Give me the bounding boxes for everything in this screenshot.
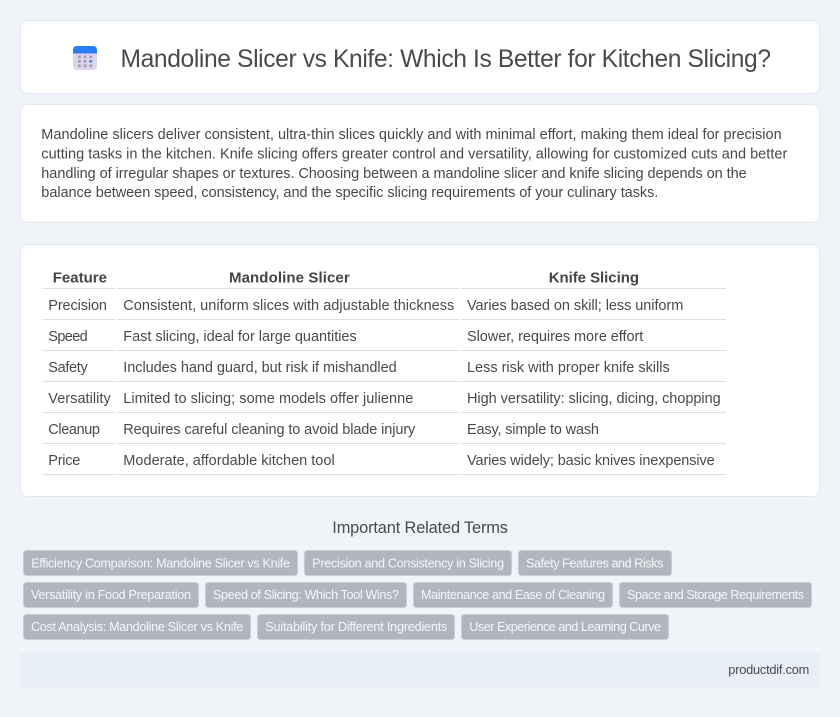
chip: Precision and Consistency in Slicing xyxy=(312,556,504,570)
table row: safety: Less risk with proper knife skills xyxy=(467,360,670,376)
table row: versatility xyxy=(43,391,726,413)
table row: speed xyxy=(43,329,726,351)
table row: price: Moderate, affordable kitchen tool xyxy=(123,453,335,469)
text block: introduction paragraph: cutting tasks in the kitchen. Knife slicing offers greater control and versatility, allowing for customized cuts and better xyxy=(41,146,787,162)
table row: cleanup: Easy, simple to wash xyxy=(467,422,599,438)
chip: Safety Features and Risks xyxy=(526,556,663,570)
chip: Cost Analysis: Mandoline Slicer vs Knife xyxy=(31,620,243,634)
footer xyxy=(20,653,820,687)
table row: speed: Speed xyxy=(48,329,88,345)
table row: speed: Fast slicing, ideal for large quantities xyxy=(123,329,357,345)
chip xyxy=(462,614,668,640)
table row: speed: Slower, requires more effort xyxy=(467,329,643,345)
panel: related term chips xyxy=(24,550,812,640)
table row: safety: Includes hand guard, but risk if mishandled xyxy=(123,360,397,376)
text block: introduction paragraph xyxy=(41,127,787,201)
table row: cleanup: Cleanup xyxy=(48,422,100,438)
table row: precision: Consistent, uniform slices with adjustable thickness xyxy=(123,298,454,314)
icon: calendar xyxy=(73,46,97,70)
table row: versatility: Limited to slicing; some models offer julienne xyxy=(123,391,413,407)
table row: precision: Varies based on skill; less uniform xyxy=(467,298,683,314)
panel: introduction xyxy=(20,104,820,222)
chip: User Experience and Learning Curve xyxy=(469,620,661,634)
chip xyxy=(24,582,198,608)
chip xyxy=(24,614,250,640)
table header row: Feature xyxy=(53,270,107,287)
chip xyxy=(24,550,298,576)
table row: versatility: Versatility xyxy=(48,391,111,407)
table row: safety: Safety xyxy=(48,360,88,376)
chip: Efficiency Comparison: Mandoline Slicer vs Knife xyxy=(31,556,290,570)
panel: comparison table xyxy=(20,244,820,496)
chip: Maintenance and Ease of Cleaning xyxy=(421,588,605,602)
table row: price: Price xyxy=(48,453,80,469)
text block: introduction paragraph: balance between speed, consistency, and the specific slicing requirements of your culinary tasks. xyxy=(41,185,658,201)
chip xyxy=(258,614,454,640)
text block: introduction paragraph: handling of irregular shapes or textures. Choosing between a mandoline slicer and knife slicing depends on the xyxy=(41,166,747,182)
panel: header xyxy=(20,20,820,94)
table header row: Knife Slicing xyxy=(549,270,639,287)
table header row xyxy=(43,270,726,289)
table row: cleanup: Requires careful cleaning to avoid blade injury xyxy=(123,422,416,438)
footer: productdif.com xyxy=(728,662,809,677)
table header row: Mandoline Slicer xyxy=(229,270,350,287)
table row: safety xyxy=(43,360,726,382)
table row: cleanup xyxy=(43,422,726,444)
chip xyxy=(620,582,812,608)
chip xyxy=(206,582,406,608)
table row: precision: Precision xyxy=(48,298,107,314)
chip xyxy=(518,550,672,576)
chip xyxy=(414,582,612,608)
text block: introduction paragraph: Mandoline slicers deliver consistent, ultra-thin slices quickly and with minimal effort, making them ideal for precision xyxy=(41,127,782,143)
chip: Speed of Slicing: Which Tool Wins? xyxy=(213,588,399,602)
table row: precision xyxy=(43,298,726,320)
table row: price: Varies widely; basic knives inexpensive xyxy=(467,453,715,469)
chip: Suitability for Different Ingredients xyxy=(265,620,447,634)
chip: Versatility in Food Preparation xyxy=(31,588,191,602)
chip xyxy=(304,550,512,576)
chip: Space and Storage Requirements xyxy=(627,588,804,602)
title: Mandoline Slicer vs Knife: Which Is Better for Kitchen Slicing? xyxy=(120,46,771,73)
table row: price xyxy=(43,453,726,475)
table row: versatility: High versatility: slicing, dicing, chopping xyxy=(467,391,721,407)
heading: related terms: Important Related Terms xyxy=(332,519,508,537)
